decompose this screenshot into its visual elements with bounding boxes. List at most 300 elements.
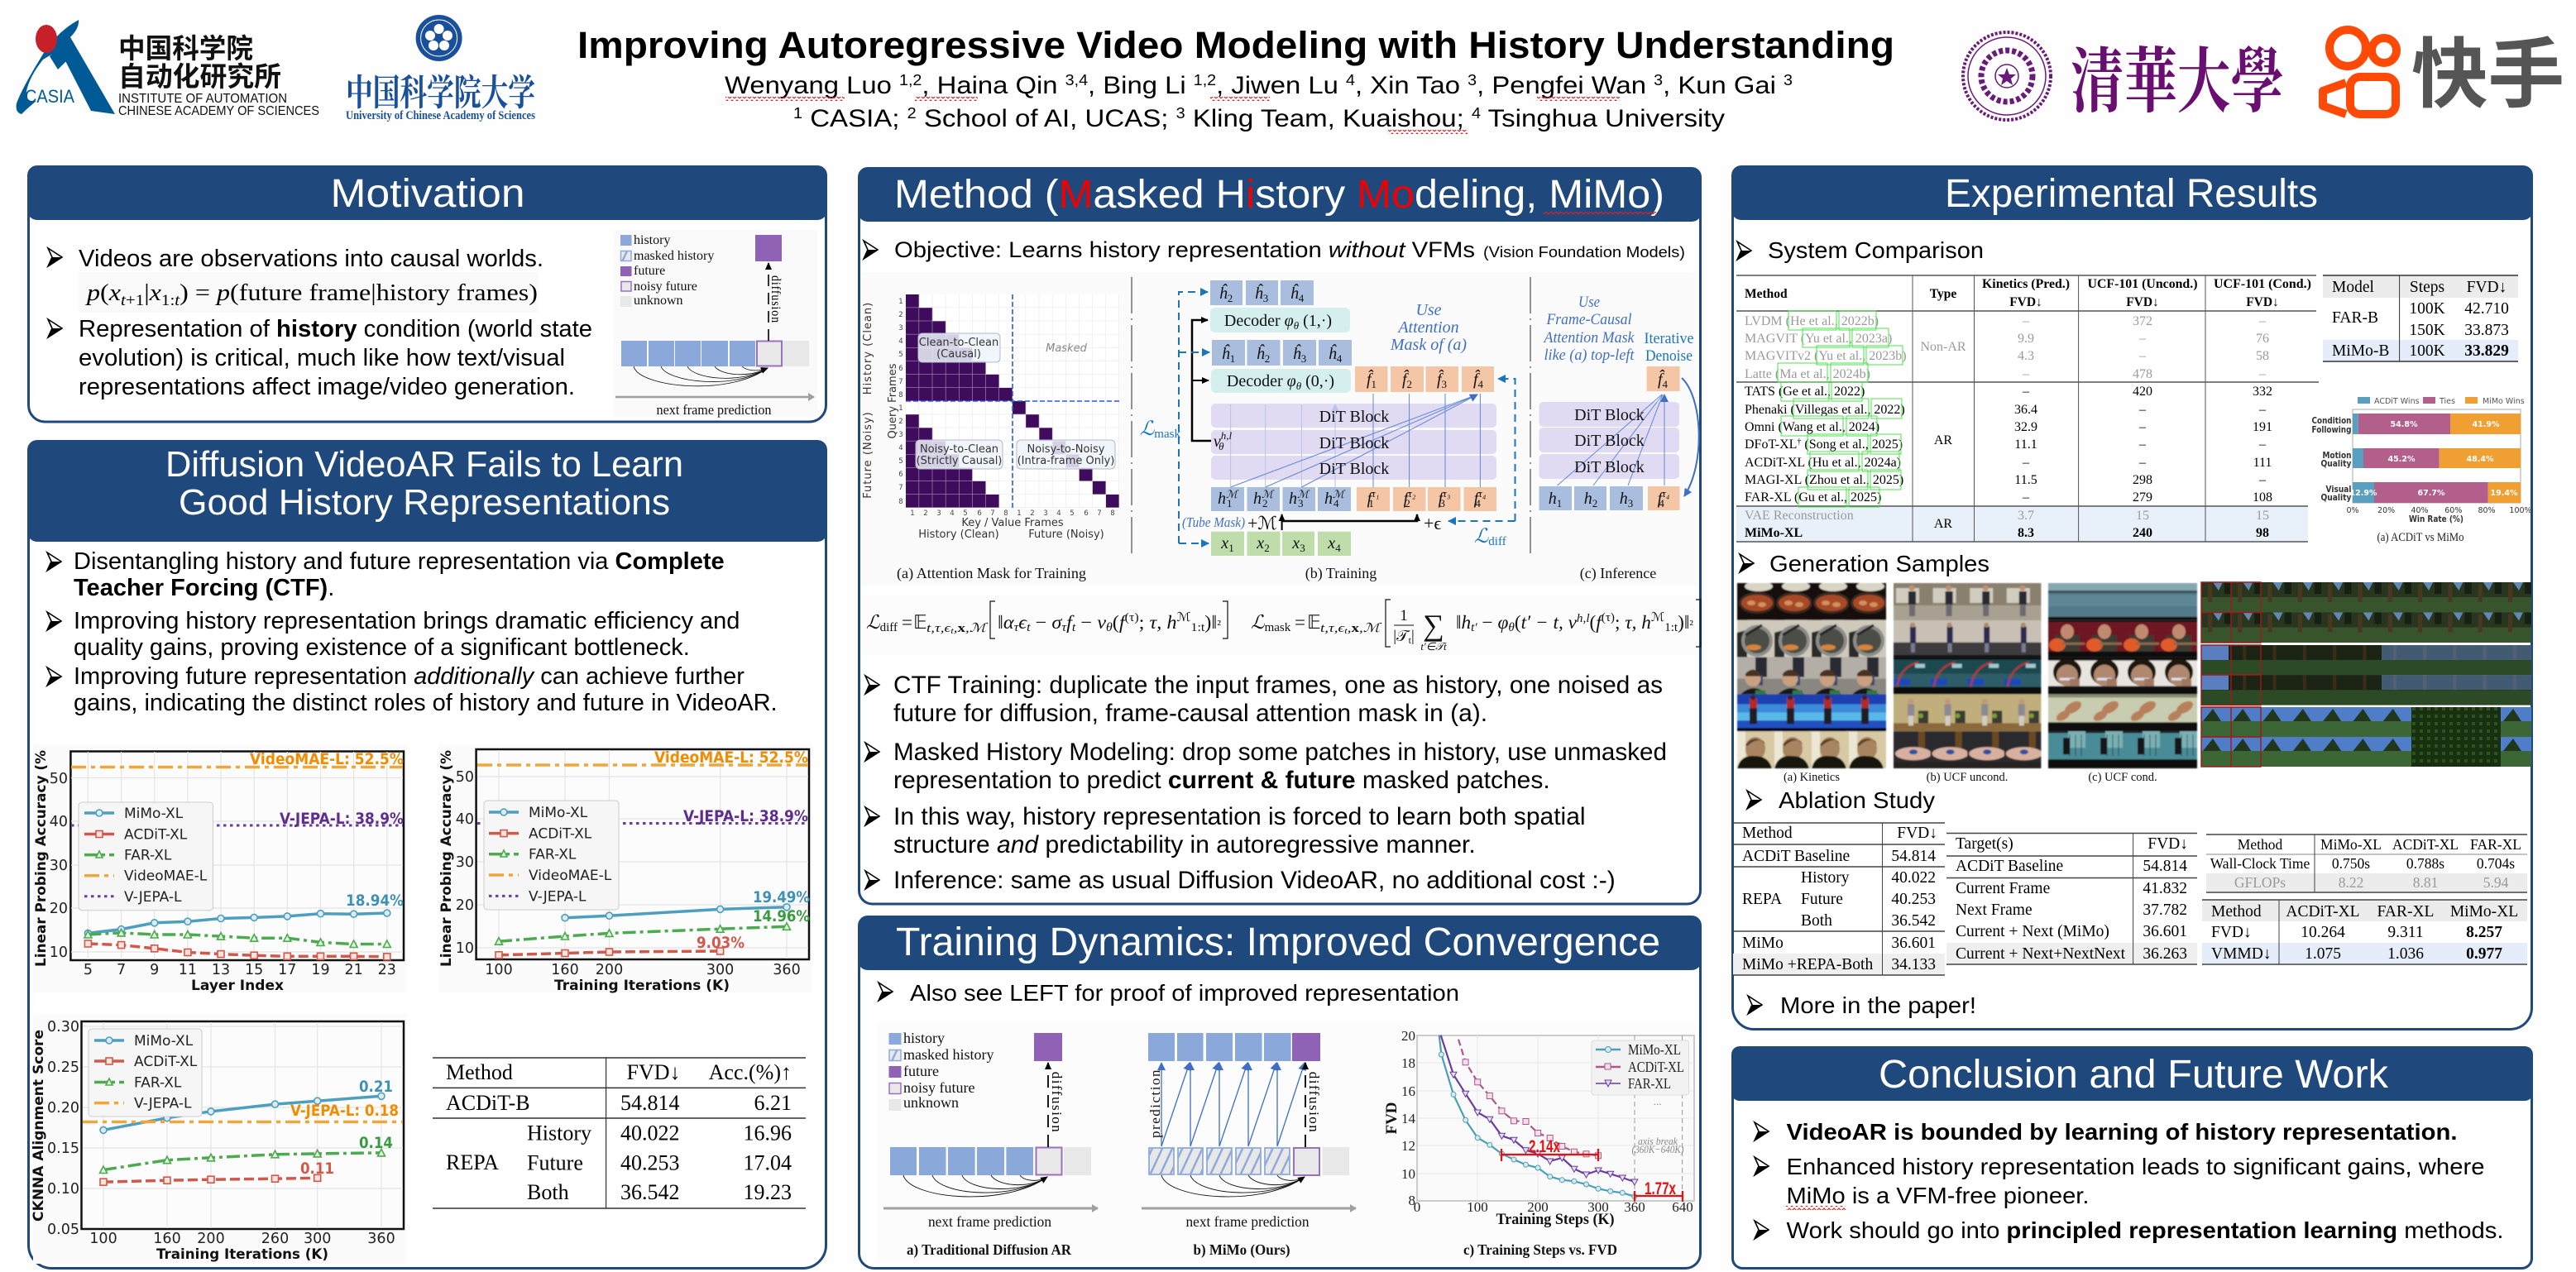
axis labels: Key / Value Frames xyxy=(961,517,1064,529)
axis labels: Training Iterations (K) xyxy=(156,1246,328,1263)
table: REPA comparison: ACDiT-B xyxy=(446,1091,530,1115)
equation: diffusion loss: ‖α xyxy=(998,612,1013,633)
axis ticks: 0% xyxy=(2346,506,2359,515)
tick labels: 3 xyxy=(936,509,941,518)
table: REPA comparison: Acc.(%)↑ xyxy=(709,1060,792,1084)
method names: TATS (Ge et al., 2022) xyxy=(1745,385,1865,399)
axis labels xyxy=(31,1030,328,1263)
symbols: τ₁ xyxy=(1372,487,1379,500)
table: model steps: 33.829 xyxy=(2464,342,2509,360)
bar values: 41.9% xyxy=(2473,420,2500,429)
symbols: x xyxy=(1221,534,1228,552)
table: ablation 1: 40.022 xyxy=(1891,869,1936,887)
tick labels: 1 xyxy=(898,404,903,413)
authors: 1,2 xyxy=(1194,72,1216,88)
symbols: 4 xyxy=(1478,378,1484,390)
tick labels: 1 xyxy=(910,509,915,518)
series: ACDiT xyxy=(1458,1040,1598,1155)
axis ticks: 0.20 xyxy=(47,1100,79,1117)
axis ticks: 100 xyxy=(1467,1199,1488,1215)
symbols xyxy=(1214,283,1487,554)
legend: MiMo-XL xyxy=(124,806,184,822)
axis ticks xyxy=(456,769,801,978)
icon: UCAS seal xyxy=(416,15,462,61)
region labels: (Intra-frame Only) xyxy=(1017,455,1114,467)
sample captions: (a) Kinetics xyxy=(1784,771,1840,784)
symbols: ĥ xyxy=(1222,345,1230,363)
panel: method xyxy=(858,167,1702,904)
panel: motivation xyxy=(27,165,827,422)
table: ablation 1: MiMo +REPA-Both xyxy=(1742,956,1873,973)
series: MiMo xyxy=(1439,1035,1635,1197)
equation: diffusion loss: ² xyxy=(1217,619,1222,632)
symbols: h xyxy=(1289,490,1297,508)
tick labels: 4 xyxy=(898,337,903,346)
axis ticks: 40 xyxy=(50,814,68,830)
panel frame xyxy=(28,496,826,1269)
sub-caption c: c) Training Steps vs. FVD xyxy=(1463,1241,1617,1259)
table: model steps: Model xyxy=(2332,279,2374,296)
formula: t xyxy=(121,292,127,309)
authors: 1,2 xyxy=(899,72,922,88)
legend: MiMo-XL xyxy=(1628,1041,1681,1058)
axis ticks xyxy=(1401,1028,1693,1215)
method names: (Song et al., 2025) xyxy=(1801,438,1903,452)
iterative denoise: Denoise xyxy=(1645,347,1693,365)
sample captions: (b) UCF uncond. xyxy=(1927,771,2008,784)
series: FAR xyxy=(499,926,787,941)
bullet: Also see LEFT for proof of improved representation xyxy=(910,980,1459,1006)
heading: method: Method (Masked History Modeling, MiMo) xyxy=(894,173,1664,217)
type column: AR xyxy=(1934,433,1952,447)
sample captions: (c) UCF cond. xyxy=(2088,771,2157,784)
symbols: 2 xyxy=(1262,497,1267,509)
photos: UCF conditional samples xyxy=(2048,583,2197,768)
masked history tokens xyxy=(1211,487,1351,511)
tick labels: 4 xyxy=(898,444,903,452)
equation: mask loss: ℒ xyxy=(1251,612,1265,633)
chart: training steps vs FVD xyxy=(1383,1028,1694,1259)
row labels xyxy=(2311,415,2351,503)
table header: FVD↓ xyxy=(2246,295,2279,309)
symbols xyxy=(1549,369,1670,509)
values: uncond: – xyxy=(2138,420,2147,434)
axis ticks: 100% xyxy=(2509,506,2532,515)
annotations: 0.14 xyxy=(359,1134,393,1152)
block labels xyxy=(1319,408,1389,478)
grid xyxy=(906,294,1119,508)
legend: FAR-XL xyxy=(134,1075,182,1092)
equation: mask loss: 1 xyxy=(1400,607,1408,624)
values: kinetics: 36.4 xyxy=(2014,403,2037,417)
symbols: 4 xyxy=(1333,497,1339,509)
axis labels: History (Clean) xyxy=(862,302,874,395)
table: ablation 1: Method xyxy=(1742,825,1793,842)
table header: FVD↓ xyxy=(2009,295,2042,309)
equation: mask loss: 𝔼 xyxy=(1307,612,1321,633)
values: cond: 58 xyxy=(2256,349,2269,363)
table header: FVD↓ xyxy=(2126,295,2159,309)
legend: Ties xyxy=(2439,397,2455,406)
method names: ACDiT-XL (Hu et al., 2024a) xyxy=(1745,456,1901,470)
symbols: ĥ xyxy=(1257,345,1265,363)
table: ablation 2: Target(s) xyxy=(1956,835,2013,853)
chart: CKNNA alignment xyxy=(31,1014,407,1264)
authors: 3 xyxy=(1654,72,1663,88)
tick labels: 6 xyxy=(977,509,982,518)
axis ticks: 300 xyxy=(706,962,734,978)
affiliations: Tsinghua University xyxy=(1481,105,1725,132)
arrow: time axis xyxy=(615,396,814,398)
equation: mask loss: ; xyxy=(1615,612,1625,633)
axis ticks: 200 xyxy=(596,962,623,978)
affiliations: 2 xyxy=(907,105,917,122)
axis ticks: 640 xyxy=(1672,1199,1693,1215)
symbols: ℳ xyxy=(1262,488,1275,500)
heading: generation samples: Generation Samples xyxy=(1769,551,1989,576)
caption: next frame prediction xyxy=(657,402,772,418)
table: ablation 1: Both xyxy=(1801,912,1832,930)
table: ablation 1: ACDiT Baseline xyxy=(1742,848,1850,865)
equation: mask loss: − xyxy=(1477,612,1497,633)
axis ticks: 100 xyxy=(89,1231,117,1247)
axis ticks: 5 xyxy=(84,962,93,978)
legend: masked history xyxy=(903,1046,994,1063)
table: ablation 2 xyxy=(1946,834,2197,964)
tick labels: 2 xyxy=(1030,509,1035,518)
equation: mask loss: )‖ xyxy=(1678,612,1689,633)
equation: diffusion loss: τ xyxy=(1014,621,1019,634)
table: REPA comparison: Method xyxy=(446,1060,513,1084)
axis ticks: 40 xyxy=(456,811,474,828)
legend xyxy=(888,1030,994,1111)
caption c: (c) Inference xyxy=(1580,565,1656,582)
bar 3 xyxy=(2353,482,2521,503)
region labels: Clean-to-Clean xyxy=(919,337,998,349)
axis labels: Query Frames xyxy=(887,363,899,438)
axis labels: Future (Noisy) xyxy=(862,411,874,499)
axis ticks: 30 xyxy=(50,858,68,874)
axis ticks: 10 xyxy=(1401,1166,1415,1182)
UCAS text: 中国科学院大学 xyxy=(346,73,535,113)
equation: mask loss: |𝒯 xyxy=(1393,628,1409,645)
equation: mask loss: | xyxy=(1411,628,1415,645)
target frame xyxy=(755,235,782,261)
arrow: time xyxy=(883,1207,1098,1209)
tick labels: 7 xyxy=(990,509,995,518)
legend: FAR-XL xyxy=(124,848,172,864)
panel: conclusion xyxy=(1731,1046,2533,1269)
heading: training dynamics: Training Dynamics: Improved Convergence xyxy=(896,921,1660,964)
table: minecraft metrics: Method xyxy=(2211,903,2262,921)
table: system comparison xyxy=(1736,275,2319,542)
annotations xyxy=(654,748,810,952)
legend xyxy=(1592,1040,1689,1095)
axis break note xyxy=(1631,1095,1684,1155)
table: ablation 1: FVD↓ xyxy=(1897,825,1937,842)
values: uncond: – xyxy=(2138,349,2147,363)
table: REPA comparison xyxy=(433,1058,806,1208)
table: timing: 0.788s xyxy=(2406,855,2444,872)
table: REPA comparison: Future xyxy=(527,1151,583,1174)
axis ticks: 360 xyxy=(367,1231,395,1247)
type column xyxy=(1920,340,1966,531)
bullets: Disentangling history and future representation via Complete xyxy=(74,548,725,575)
table: ablation 1: 40.253 xyxy=(1891,891,1936,908)
table: ablation 1: Future xyxy=(1801,891,1843,908)
tick labels: 5 xyxy=(1070,509,1075,518)
table: REPA comparison: 16.96 xyxy=(743,1121,792,1145)
plot frame xyxy=(2353,409,2521,503)
bullets: Enhanced history representation leads to significant gains, where xyxy=(1787,1154,2485,1179)
row labels: Condition xyxy=(2311,415,2351,426)
annotations: V-JEPA-L: 38.9% xyxy=(280,810,404,828)
legend: V-JEPA-L xyxy=(124,889,182,906)
values: kinetics: – xyxy=(2022,456,2030,470)
symbols: τ₂ xyxy=(1408,487,1416,500)
symbols: 2 xyxy=(1265,352,1270,365)
equation: mask loss: t′ xyxy=(1471,621,1477,634)
bar values xyxy=(2350,420,2518,498)
method names: LVDM (He et al., 2022b) xyxy=(1745,314,1879,328)
legend: ACDiT-XL xyxy=(529,826,592,843)
bar values: 54.8% xyxy=(2391,420,2418,429)
axis ticks: 0.25 xyxy=(47,1059,79,1076)
bullets: Teacher Forcing (CTF). xyxy=(74,575,334,601)
method bullets: future for diffusion, frame-causal attention mask in (a). xyxy=(893,700,1487,727)
symbols: 3 xyxy=(1298,497,1303,509)
heading: experimental results: Experimental Results xyxy=(1945,172,2318,216)
decoder 0 xyxy=(1211,369,1351,393)
axis ticks: 20 xyxy=(1401,1028,1415,1044)
row labels: Quality xyxy=(2321,458,2351,469)
authors: , Jiwen Lu xyxy=(1216,72,1346,99)
equation: mask loss: 1:t xyxy=(1664,621,1678,634)
symbols: 3 xyxy=(1439,497,1445,509)
arrow: diffusion xyxy=(1048,1063,1065,1147)
tick labels: 2 xyxy=(923,509,928,518)
sample captions xyxy=(1784,771,2157,784)
axis ticks: 7 xyxy=(117,962,126,978)
table: REPA comparison: 36.542 xyxy=(620,1180,680,1204)
tick labels: 8 xyxy=(1003,509,1008,518)
decoder 0: Decoder φ xyxy=(1227,372,1296,390)
symbols: τ₄ xyxy=(1662,487,1670,500)
axis ticks xyxy=(2346,506,2532,515)
row labels: Visual xyxy=(2326,484,2351,495)
citation boxes xyxy=(1778,311,1903,507)
table: minecraft metrics: 1.075 xyxy=(2305,945,2341,963)
table: timing: GFLOPs xyxy=(2234,874,2286,891)
heading: ablation study: Ablation Study xyxy=(1779,787,1935,813)
axis ticks: 0 xyxy=(1414,1199,1420,1215)
chart: linear probing vs layer xyxy=(33,744,407,994)
panel: experimental results xyxy=(1731,165,2533,1029)
bullets xyxy=(1755,1119,2503,1243)
axis ticks: 300 xyxy=(304,1231,331,1247)
axis ticks: 30 xyxy=(456,854,474,871)
legend xyxy=(2358,397,2525,406)
panel frame xyxy=(859,943,1701,1269)
frames xyxy=(1647,366,1680,510)
axis label: Win Rate (%) xyxy=(2409,514,2463,524)
equation: diffusion loss: f xyxy=(1066,612,1075,633)
bullets: representations affect image/video generation. xyxy=(79,374,575,400)
legend: ACDiT Wins xyxy=(2374,397,2420,406)
table: REPA comparison: 40.253 xyxy=(620,1151,680,1174)
heading: motivation: Motivation xyxy=(331,172,524,216)
axis labels: CKNNA Alignment Score xyxy=(31,1030,47,1222)
table: minecraft metrics: FAR-XL xyxy=(2377,903,2434,921)
CASIA text xyxy=(118,33,319,118)
formula: p(future frame|history frames) xyxy=(217,280,508,306)
panel frame xyxy=(28,190,826,422)
formula: +1 xyxy=(126,292,144,309)
panel frame xyxy=(1732,190,2531,1029)
legend: ACDiT-XL xyxy=(1628,1059,1684,1075)
block labels: DiT Block xyxy=(1319,460,1389,478)
method names: † xyxy=(1797,438,1801,447)
equation: mask loss: ℳ xyxy=(1651,611,1664,624)
formula xyxy=(79,272,538,313)
axis break note: (360K−640K) xyxy=(1631,1143,1684,1155)
blue loss arrows xyxy=(1179,292,1515,543)
legend: VideoMAE-L xyxy=(529,868,612,884)
icon: CASIA emblem: CASIA xyxy=(25,86,74,107)
values: uncond: 240 xyxy=(2133,526,2152,540)
frame row xyxy=(621,341,809,366)
table: timing: 8.81 xyxy=(2413,874,2438,891)
equation: diffusion loss: t xyxy=(1027,621,1031,634)
axis ticks: 200 xyxy=(1527,1199,1549,1215)
legend xyxy=(89,1029,202,1117)
note: Use xyxy=(1578,294,1600,311)
legend: noisy future xyxy=(634,280,697,294)
table: minecraft metrics: 1.036 xyxy=(2387,945,2424,963)
axis ticks: 0.15 xyxy=(47,1140,79,1157)
legend: history xyxy=(903,1030,945,1046)
axis labels xyxy=(1383,1102,1615,1228)
equation: diffusion loss: ϵ xyxy=(1018,612,1027,633)
values: cond: – xyxy=(2258,438,2267,452)
DiT blocks xyxy=(1539,402,1679,479)
annotations xyxy=(290,1078,399,1178)
reconstructed history top xyxy=(1210,280,1314,305)
symbols: 4 xyxy=(1475,497,1481,509)
prediction label: prediction xyxy=(1147,1069,1163,1138)
method bullets: CTF Training: duplicate the input frames, one as history, one noised as xyxy=(893,672,1663,699)
table: REPA comparison: 19.23 xyxy=(743,1180,792,1204)
tick labels: 8 xyxy=(898,391,903,399)
heading: diffusion videoar: Good History Representations xyxy=(179,482,670,523)
symbols: 1 xyxy=(1372,378,1377,390)
thin arrows xyxy=(1231,394,1480,487)
legend: unknown xyxy=(634,294,683,308)
masked row xyxy=(1149,1148,1290,1174)
symbols: 1 xyxy=(1368,497,1374,509)
bullets xyxy=(48,246,592,400)
axis ticks: 13 xyxy=(212,962,230,978)
legend: future xyxy=(903,1063,939,1079)
symbols: h xyxy=(1324,490,1333,508)
values: uncond: – xyxy=(2138,403,2147,417)
values: uncond: – xyxy=(2138,438,2147,452)
symbols: f̂ xyxy=(1402,371,1407,389)
region labels: (Causal) xyxy=(936,348,981,361)
series: MiMo xyxy=(103,1096,381,1130)
values: kinetics: – xyxy=(2022,385,2030,399)
tick labels: 7 xyxy=(1097,509,1102,518)
table: model steps: 150K xyxy=(2409,322,2445,339)
bullets xyxy=(47,548,778,716)
symbols: 3 xyxy=(1628,497,1633,509)
table: minecraft metrics: FVD↓ xyxy=(2211,924,2252,941)
table: ablation 2: 54.814 xyxy=(2143,858,2187,875)
decoder 1: θ xyxy=(1294,319,1300,332)
type column: Non-AR xyxy=(1920,340,1966,354)
annotations: V-JEPA-L: 0.18 xyxy=(290,1102,399,1120)
values: cond: – xyxy=(2258,403,2267,417)
legend: ACDiT-XL xyxy=(134,1054,198,1070)
table: model steps: MiMo-B xyxy=(2332,342,2389,360)
axis ticks: 20 xyxy=(456,897,474,914)
tick labels xyxy=(898,298,1115,518)
table: model steps: 100K xyxy=(2409,300,2445,318)
title: Improving Autoregressive Video Modeling with History Understanding xyxy=(577,24,1894,66)
loss labels: ℒ xyxy=(1140,418,1154,440)
authors: 3 xyxy=(1468,72,1477,88)
legend: VideoMAE-L xyxy=(124,868,208,885)
decoder 1: Decoder φ xyxy=(1224,312,1294,330)
tick labels: 6 xyxy=(898,471,903,479)
chart: win rate bars xyxy=(2311,397,2532,544)
equation: mask loss: φ xyxy=(1497,612,1509,633)
annotations: V-JEPA-L: 38.9% xyxy=(683,807,808,825)
axis ticks: 16 xyxy=(1401,1083,1415,1099)
target xyxy=(1034,1033,1062,1061)
axis break note: ... xyxy=(1654,1095,1662,1107)
table: ablation 1: MiMo xyxy=(1742,935,1784,952)
axis ticks: 160 xyxy=(551,962,579,978)
annotations: VideoMAE-L: 52.5% xyxy=(250,750,404,768)
table: minecraft metrics: MiMo-XL xyxy=(2450,903,2518,921)
table: ablation 1: History xyxy=(1801,869,1850,887)
values: kinetics: – xyxy=(2022,490,2030,504)
axis labels: Linear Probing Accuracy (% xyxy=(33,750,50,967)
values: kinetics: 32.9 xyxy=(2014,420,2037,434)
attention note xyxy=(1390,301,1467,354)
predicted frames xyxy=(1355,366,1494,392)
loss labels: mask xyxy=(1154,428,1180,441)
table: timing xyxy=(2206,834,2527,892)
heading: diffusion videoar xyxy=(27,440,827,542)
series: FAR xyxy=(103,1153,381,1169)
legend: future xyxy=(634,264,665,278)
equation: diffusion loss: τ, h xyxy=(1150,612,1177,633)
equation: diffusion loss: ; xyxy=(1139,612,1150,633)
legend xyxy=(79,802,213,911)
table: timing: FAR-XL xyxy=(2470,836,2521,853)
values: cond: 15 xyxy=(2256,509,2269,523)
equation: diffusion loss xyxy=(866,601,1228,638)
note: like (a) top-left xyxy=(1544,347,1635,364)
authors: , Pengfei Wan xyxy=(1477,72,1654,99)
iterative denoise: Iterative xyxy=(1645,330,1694,347)
axis ticks: 20% xyxy=(2377,506,2395,515)
region labels: Masked xyxy=(1046,342,1088,355)
bar 1 xyxy=(2353,414,2521,434)
decoder 0: θ xyxy=(1296,380,1302,392)
